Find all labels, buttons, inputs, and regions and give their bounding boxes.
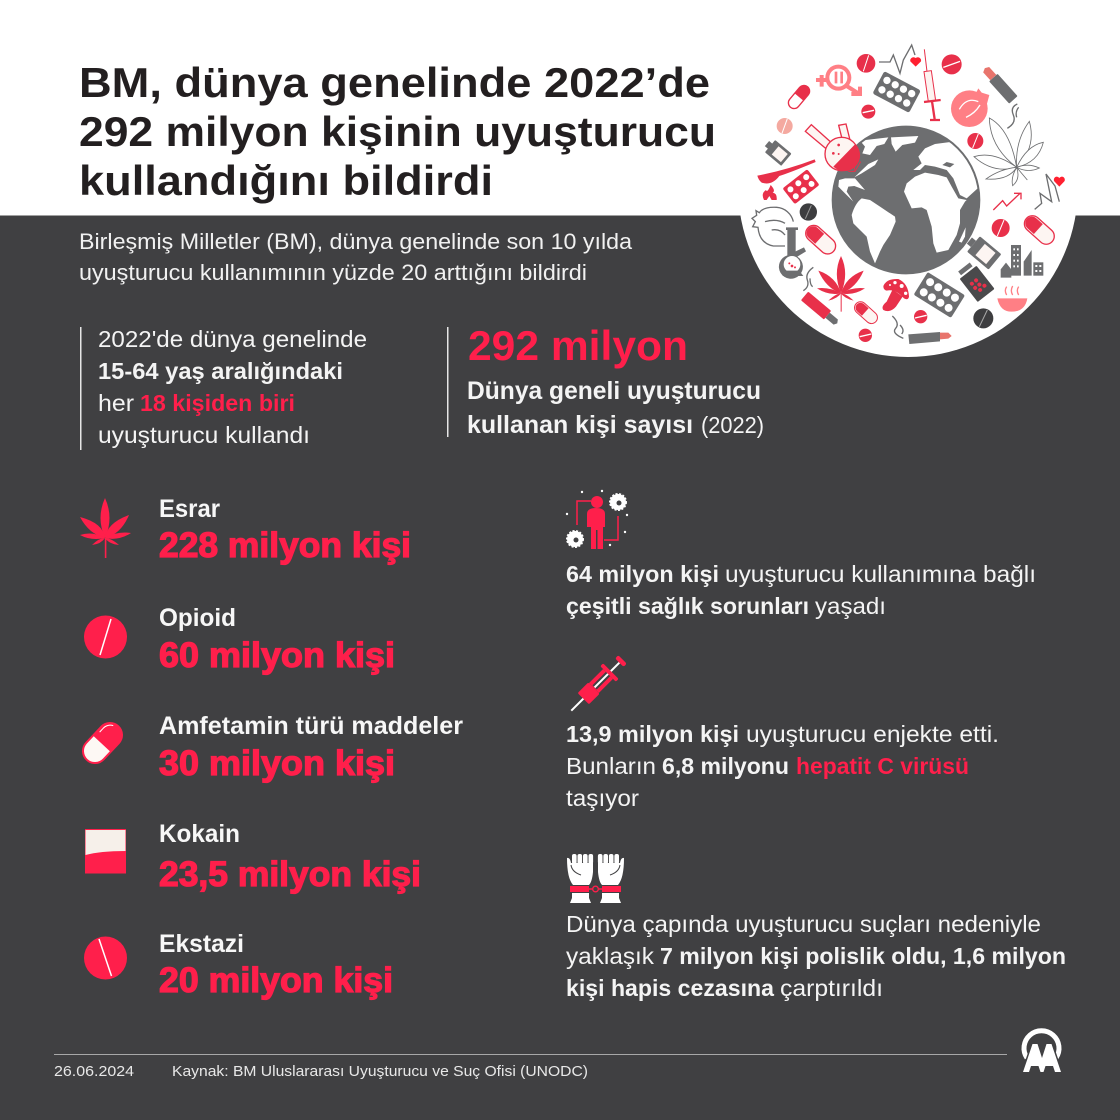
fact: injection bbox=[563, 652, 999, 811]
list item: Amfetamin bbox=[78, 712, 463, 783]
title bbox=[79, 59, 716, 204]
footer: date and source: Kaynak: BM Uluslararası Uyuşturucu ve Suç Ofisi (UNODC) bbox=[172, 1063, 588, 1080]
icon: lipstick bottom bbox=[908, 332, 952, 344]
fact: health problems: çeşitli sağlık sorunları bbox=[566, 593, 809, 619]
icon: outline capsule bbox=[786, 83, 812, 111]
fact: injection: uyuşturucu enjekte etti. bbox=[746, 721, 999, 747]
icon: smoke left bbox=[803, 267, 813, 291]
stat: 292 million: Dünya geneli uyuşturucu bbox=[467, 377, 761, 405]
icon: rising arrow bbox=[993, 193, 1021, 210]
icon: bong bbox=[779, 227, 806, 279]
icon: capsule left bbox=[802, 222, 839, 257]
icon: gray blister bottom bbox=[914, 272, 965, 318]
fact: injection: hepatit C virüsü bbox=[796, 753, 969, 779]
list item: Kokain: 23,5 milyon kişi bbox=[159, 855, 421, 894]
stat: one in 18: 18 kişiden biri bbox=[140, 390, 295, 416]
logo: AA bbox=[1023, 1031, 1061, 1072]
footer: rule bbox=[54, 1054, 1007, 1055]
stat: one in 18: 2022'de dünya genelinde bbox=[98, 326, 367, 352]
icon: capsule bottom bbox=[852, 299, 880, 326]
list item: Esrar bbox=[80, 495, 411, 565]
fact: injection: 13,9 milyon kişi bbox=[566, 721, 739, 747]
fact: crime: Dünya çapında uyuşturucu suçları nedeniyle bbox=[566, 911, 1041, 937]
stat: 292 million: kullanan kişi sayısı bbox=[467, 411, 693, 439]
icon: round pills bbox=[777, 54, 1010, 342]
icon: flame bbox=[763, 185, 777, 200]
list item: Amfetamin: Amfetamin türü maddeler bbox=[159, 712, 463, 740]
icon: capsule right bbox=[1021, 212, 1058, 248]
icon: smoke bottom bbox=[892, 316, 903, 338]
fact: crime: çarptırıldı bbox=[780, 975, 883, 1001]
icon: red blister bbox=[782, 169, 820, 204]
icon: gray blister top bbox=[872, 71, 921, 113]
icon: round pill bbox=[84, 936, 127, 980]
fact: injection: Bunların bbox=[566, 753, 656, 779]
stat: one in 18: uyuşturucu kullandı bbox=[98, 422, 310, 448]
icon: capsule bbox=[78, 717, 128, 768]
list item: Ekstazi: Ekstazi bbox=[159, 930, 244, 958]
list item: Ekstazi: 20 milyon kişi bbox=[159, 961, 393, 1000]
fact: crime bbox=[566, 854, 1066, 1001]
icon: powder block bbox=[85, 829, 126, 874]
fact: crime: kişi hapis cezasına bbox=[566, 975, 774, 1001]
icon: soup bowl bbox=[997, 286, 1027, 312]
list item: Ekstazi bbox=[84, 930, 393, 1000]
stat: one in 18: her bbox=[98, 390, 134, 416]
icon: outline pomegranate bbox=[752, 207, 793, 246]
icon: handcuffed hands bbox=[567, 854, 624, 903]
background: white header bbox=[0, 0, 1120, 216]
stat: 292 million: 292 milyon bbox=[468, 322, 688, 369]
icon: small bottle bbox=[762, 137, 792, 166]
icon: mushroom bbox=[883, 279, 909, 311]
icon: cannabis leaf bbox=[80, 498, 131, 558]
icon: person with viruses bbox=[566, 490, 628, 549]
list item: Amfetamin: 30 milyon kişi bbox=[159, 744, 395, 783]
subtitle: uyuşturucu kullanımının yüzde 20 arttığını bildirdi bbox=[79, 260, 587, 285]
icon: spoon bbox=[757, 159, 816, 183]
icon: syringe bbox=[924, 49, 941, 120]
fact: health problems: uyuşturucu kullanımına bağlı bbox=[725, 561, 1036, 587]
subtitle: Birleşmiş Milletler (BM), dünya genelinde son 10 yılda bbox=[79, 229, 633, 254]
icon: round pill bbox=[84, 616, 127, 658]
icon: lipstick top right bbox=[981, 64, 1018, 104]
stat: 292 million: (2022) bbox=[701, 412, 764, 438]
fact: crime: 7 milyon kişi polislik oldu, 1,6 milyon bbox=[660, 943, 1066, 969]
subtitle bbox=[79, 229, 633, 285]
list item: Opioid: 60 milyon kişi bbox=[159, 636, 395, 675]
icon: red cannabis leaf bbox=[817, 256, 865, 312]
stat: one in 18: 15-64 yaş aralığındaki bbox=[98, 358, 343, 384]
fact: health problems: yaşadı bbox=[815, 593, 886, 619]
icon: flask bbox=[805, 124, 861, 171]
list item: Kokain bbox=[85, 820, 421, 894]
fact: injection: taşıyor bbox=[566, 785, 639, 811]
icon: red lipstick tube bbox=[801, 292, 841, 328]
list item: Kokain: Kokain bbox=[159, 820, 240, 848]
footer: date and source: 26.06.2024 bbox=[54, 1063, 134, 1080]
icon: smoke bbox=[1007, 104, 1019, 128]
stat: one in 18 bbox=[80, 326, 367, 450]
list item: Esrar: 228 milyon kişi bbox=[159, 526, 411, 565]
list item: Opioid bbox=[84, 604, 395, 675]
stat: 292 million bbox=[447, 322, 764, 439]
list item: Opioid: Opioid bbox=[159, 604, 236, 632]
icon: pomegranate bbox=[951, 88, 989, 127]
title: BM, dünya genelinde 2022’de bbox=[79, 59, 710, 106]
icon: city bbox=[1001, 245, 1043, 278]
icon: gender symbol bbox=[816, 67, 860, 94]
fact: injection: 6,8 milyonu bbox=[662, 753, 789, 779]
illustration: drug icons around globe bbox=[738, 17, 1078, 357]
fact: health problems: 64 milyon kişi bbox=[566, 561, 719, 587]
icon: heartbeat lines with hearts bbox=[879, 45, 1065, 209]
list item: Esrar: Esrar bbox=[159, 495, 220, 523]
icon: pill jar bbox=[956, 260, 995, 302]
fact: health problems bbox=[566, 490, 1036, 619]
icon: outline cannabis leaf bbox=[974, 118, 1043, 186]
icon: globe bbox=[832, 126, 980, 274]
title: 292 milyon kişinin uyuşturucu bbox=[79, 108, 716, 155]
icon: bottle right bbox=[963, 233, 1001, 270]
title: kullandığını bildirdi bbox=[79, 157, 493, 204]
fact: crime: yaklaşık bbox=[566, 943, 655, 969]
icon: syringe bbox=[563, 652, 630, 719]
